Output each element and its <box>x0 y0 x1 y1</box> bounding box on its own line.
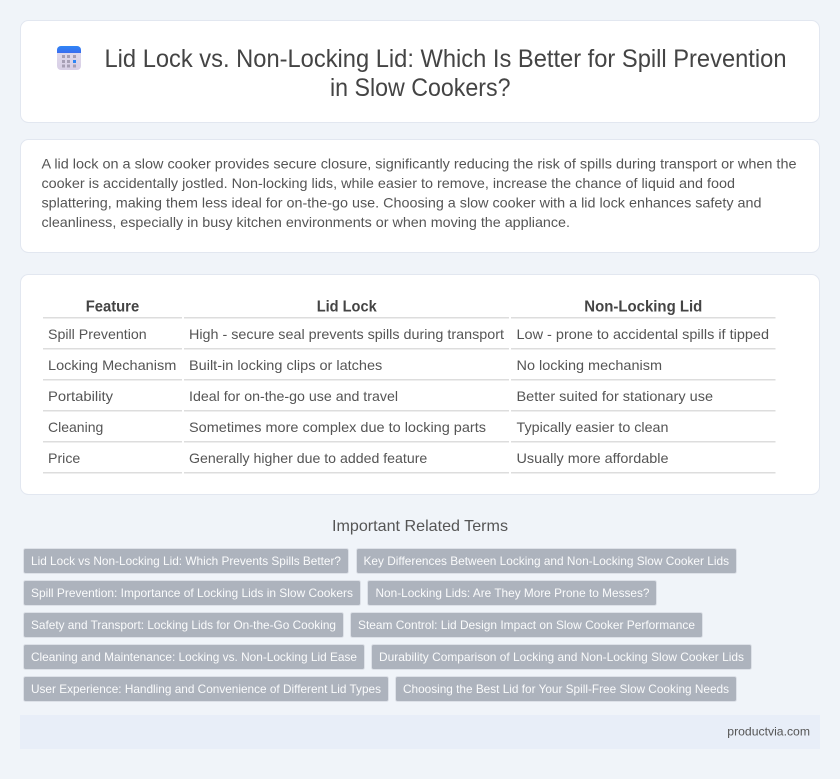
table row: spill prevention: Low - prone to accidental spills if tipped <box>516 326 769 342</box>
tag <box>24 580 360 606</box>
table row: spill prevention <box>43 326 776 350</box>
tag: Cleaning and Maintenance: Locking vs. Non-Locking Lid Ease <box>31 650 357 664</box>
table header row <box>43 299 776 318</box>
table row: cleaning: Cleaning <box>48 419 103 435</box>
table row: locking mechanism <box>43 357 776 380</box>
tag <box>396 676 736 702</box>
title <box>104 45 786 102</box>
table row: spill prevention: High - secure seal prevents spills during transport <box>189 326 504 342</box>
table row: price: Price <box>48 450 81 466</box>
title: in Slow Cookers? <box>330 74 510 102</box>
table row: price <box>43 450 776 474</box>
tag: Choosing the Best Lid for Your Spill-Free Slow Cooking Needs <box>403 682 729 696</box>
tag: Safety and Transport: Locking Lids for On-the-Go Cooking <box>31 618 336 632</box>
table row: portability: Better suited for stationary use <box>516 388 713 404</box>
text block: summary paragraph: cooker is accidentally jostled. Non-locking lids, while easier to remove, increase the chance of liquid and food <box>42 175 735 191</box>
table row: cleaning: Typically easier to clean <box>516 419 668 435</box>
related term tags <box>24 548 752 702</box>
tag <box>24 548 348 574</box>
tag <box>356 548 736 574</box>
table row: cleaning <box>43 419 776 442</box>
table row: locking mechanism: Built-in locking clips or latches <box>189 357 382 373</box>
heading: important related terms: Important Related Terms <box>332 518 508 535</box>
tag: Non-Locking Lids: Are They More Prone to Messes? <box>376 586 650 600</box>
tag: Durability Comparison of Locking and Non-Locking Slow Cooker Lids <box>379 650 744 664</box>
table row: portability <box>43 388 776 412</box>
table row: portability: Ideal for on-the-go use and travel <box>189 388 398 404</box>
tag: Lid Lock vs Non-Locking Lid: Which Prevents Spills Better? <box>31 554 341 568</box>
table row: price: Generally higher due to added feature <box>189 450 428 466</box>
panel: header <box>20 20 820 122</box>
table header row: Feature <box>86 299 140 316</box>
table row: portability: Portability <box>48 388 113 404</box>
table row: locking mechanism: Locking Mechanism <box>48 357 176 373</box>
tag <box>24 612 344 638</box>
table row: cleaning: Sometimes more complex due to locking parts <box>189 419 486 435</box>
tag: Spill Prevention: Importance of Locking Lids in Slow Cookers <box>31 586 353 600</box>
tag <box>24 644 364 670</box>
tag <box>368 580 656 606</box>
tag <box>24 676 388 702</box>
panel: summary <box>20 140 820 252</box>
table header row: Non-Locking Lid <box>584 299 702 316</box>
text block: summary paragraph: A lid lock on a slow cooker provides secure closure, significantly reducing the risk of spills during transport or when the <box>42 155 797 171</box>
footer <box>20 715 820 749</box>
tag: Key Differences Between Locking and Non-Locking Slow Cooker Lids <box>364 554 729 568</box>
tag <box>372 644 752 670</box>
table row: locking mechanism: No locking mechanism <box>516 357 662 373</box>
tag: User Experience: Handling and Convenience of Different Lid Types <box>31 682 381 696</box>
text block: summary paragraph <box>42 155 797 230</box>
panel: comparison table <box>20 274 820 494</box>
text block: summary paragraph: splattering, making them less ideal for on-the-go use. Choosing a slow cooker with a lid lock enhances safety and <box>42 194 762 210</box>
icon: calendar <box>57 46 81 70</box>
table row: spill prevention: Spill Prevention <box>48 326 147 342</box>
tag: Steam Control: Lid Design Impact on Slow Cooker Performance <box>358 618 695 632</box>
title: Lid Lock vs. Non-Locking Lid: Which Is Better for Spill Prevention <box>104 45 786 73</box>
table row: price: Usually more affordable <box>516 450 669 466</box>
text block: summary paragraph: cleanliness, especially in busy kitchen environments or when moving the appliance. <box>42 214 570 230</box>
tag <box>350 612 702 638</box>
table header row: Lid Lock <box>317 299 377 316</box>
footer: productvia.com <box>727 725 810 739</box>
